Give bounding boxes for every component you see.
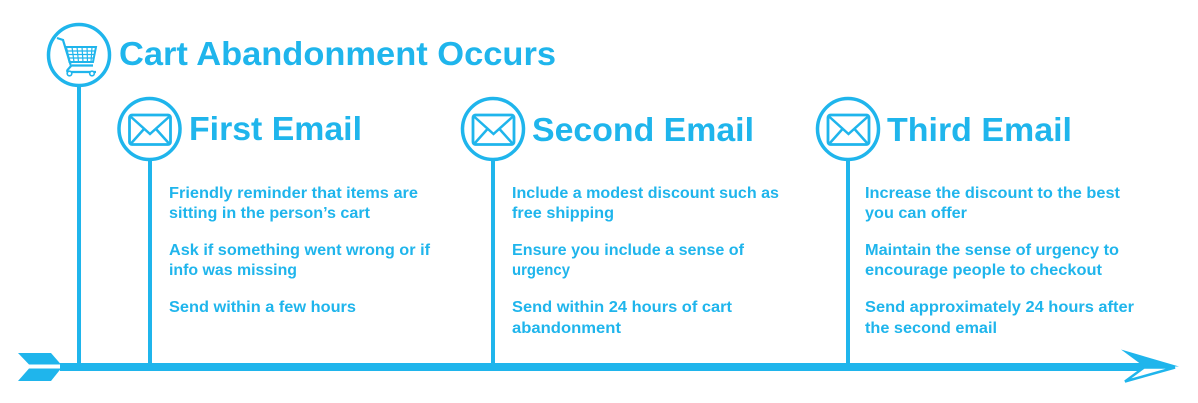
text block: third email points: Send approximately 24 hours after <box>865 299 1134 316</box>
icon: envelope, first email <box>119 98 180 160</box>
text block: second email points: Send within 24 hours of cart <box>512 299 733 316</box>
text block: second email points: urgency <box>512 262 570 279</box>
text block: third email points: Increase the discount to the best <box>865 185 1121 202</box>
stem: third email <box>846 159 850 364</box>
text block: first email points: info was missing <box>169 262 297 279</box>
stem: second email <box>491 159 495 364</box>
heading: first email: First Email <box>189 110 362 147</box>
text block: second email points: Include a modest discount such as <box>512 185 779 202</box>
text block: first email points <box>169 185 431 316</box>
text block: first email points: Send within a few hours <box>169 299 356 316</box>
text block: third email points: you can offer <box>865 205 967 222</box>
heading: cart abandonment occurs: Cart Abandonment Occurs <box>119 35 556 72</box>
heading: second email: Second Email <box>532 111 754 148</box>
text block: first email points: Friendly reminder that items are <box>169 185 418 202</box>
timeline arrow <box>18 350 1179 382</box>
icon: envelope, third email <box>818 98 878 160</box>
text block: first email points: Ask if something went wrong or if <box>169 242 431 259</box>
text block: first email points: sitting in the person’s cart <box>169 205 371 222</box>
heading: third email: Third Email <box>887 111 1072 148</box>
text block: third email points: encourage people to checkout <box>865 262 1103 279</box>
text block: third email points: the second email <box>865 320 997 337</box>
stem: first email <box>148 159 152 364</box>
stem: cart abandonment <box>77 85 81 364</box>
text block: second email points: Ensure you include a sense of <box>512 242 745 259</box>
text block: third email points: Maintain the sense of urgency to <box>865 242 1119 259</box>
icon: shopping cart <box>48 24 110 86</box>
text block: second email points: free shipping <box>512 205 614 222</box>
text block: second email points: abandonment <box>512 320 622 337</box>
text block: third email points <box>865 185 1134 337</box>
text block: second email points <box>512 185 779 337</box>
icon: envelope, second email <box>462 98 524 160</box>
